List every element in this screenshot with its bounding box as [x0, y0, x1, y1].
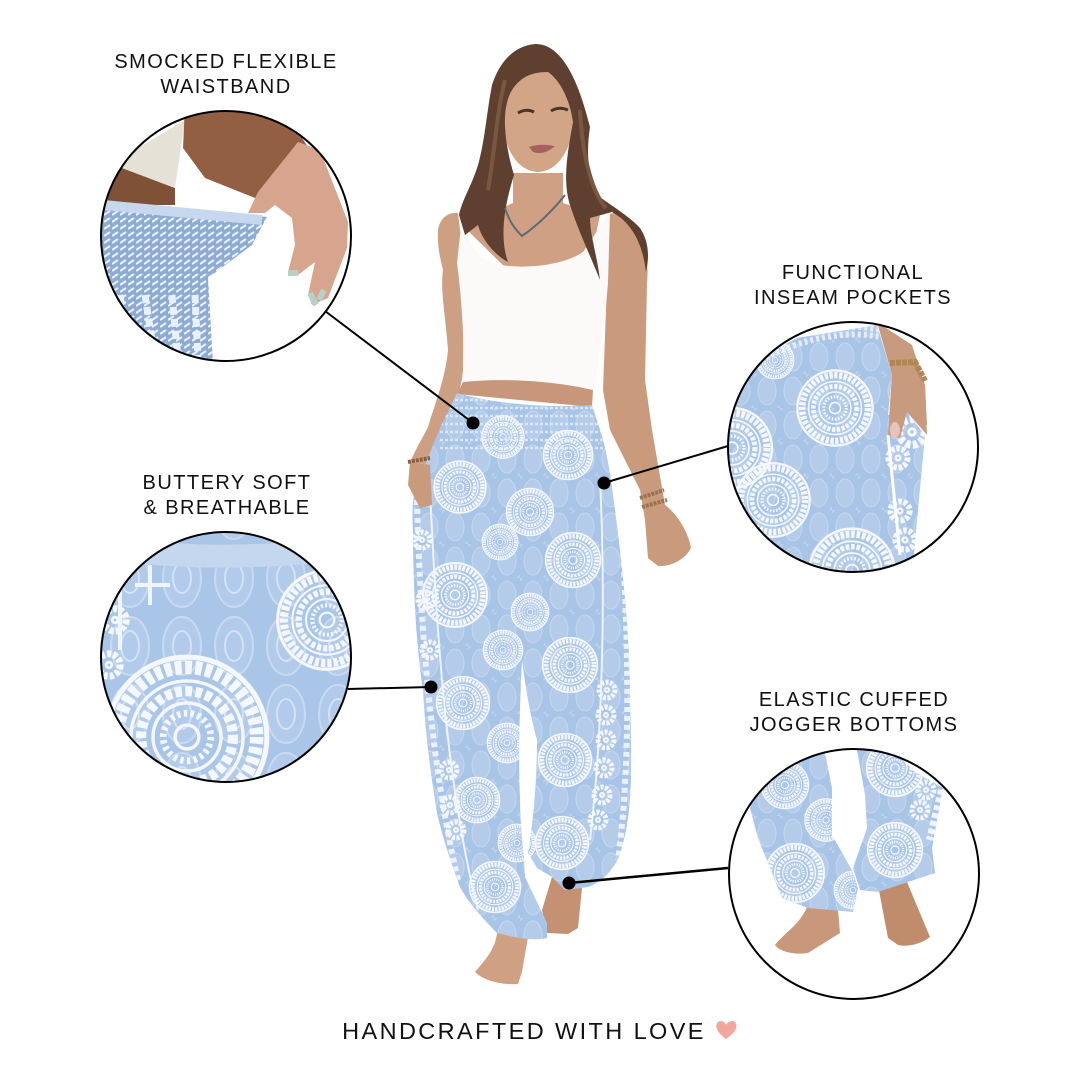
- pants: [412, 393, 632, 940]
- model figure: [400, 44, 691, 984]
- white top: [457, 212, 610, 390]
- hair highlights: [488, 80, 606, 208]
- left hand in pocket: [408, 462, 432, 508]
- heading: waistband: SMOCKED FLEXIBLE: [114, 51, 338, 73]
- face: [503, 68, 573, 172]
- hand over pocket: [888, 375, 927, 438]
- face features: [518, 108, 568, 153]
- forearm: [107, 168, 175, 205]
- panel: smocked waistband: [95, 105, 352, 362]
- panel: elastic cuffs: [728, 740, 980, 1000]
- heading: cuffs: ELASTIC CUFFED: [759, 689, 949, 711]
- fingernail: [890, 422, 900, 438]
- callout line: waistband: [325, 311, 480, 430]
- back foot: [542, 877, 582, 934]
- heading: waistband: WAISTBAND: [160, 76, 292, 98]
- nails: [288, 273, 324, 305]
- hand: [877, 322, 927, 438]
- left foot: [775, 905, 840, 954]
- icon: heart: [716, 1021, 737, 1039]
- heading: fabric: & BREATHABLE: [143, 497, 311, 519]
- panel: buttery soft fabric: [100, 531, 352, 783]
- right bracelets: [640, 490, 667, 507]
- right leg: [853, 750, 943, 892]
- heading: pockets: INSEAM POCKETS: [754, 287, 952, 309]
- side bands: [430, 490, 478, 910]
- neck and chest: [462, 173, 600, 272]
- hair: [459, 44, 648, 280]
- heading: pockets: FUNCTIONAL: [782, 262, 924, 284]
- upper arm: [183, 105, 310, 198]
- left arm: [410, 213, 464, 465]
- fabric: [729, 325, 925, 571]
- heading: cuffs: JOGGER BOTTOMS: [750, 714, 958, 736]
- tagline: HANDCRAFTED WITH LOVE: [342, 1018, 706, 1044]
- hand: [248, 142, 348, 305]
- left leg: [750, 754, 858, 912]
- right foot: [878, 882, 930, 946]
- heading: fabric: BUTTERY SOFT: [143, 472, 311, 494]
- right arm: [603, 213, 691, 566]
- callout line: pockets: [598, 446, 728, 490]
- smocked fabric: [95, 200, 267, 362]
- sleeve: [122, 120, 185, 188]
- callout line: cuffs: [562, 868, 728, 890]
- left bracelet: [408, 458, 430, 462]
- necklace: [505, 195, 565, 236]
- front foot: [475, 933, 528, 984]
- panel: inseam pockets: [727, 321, 979, 573]
- waistband smocking: [440, 400, 605, 448]
- callout line: fabric: [348, 680, 438, 694]
- midriff: [457, 380, 593, 407]
- bracelet: [890, 362, 925, 381]
